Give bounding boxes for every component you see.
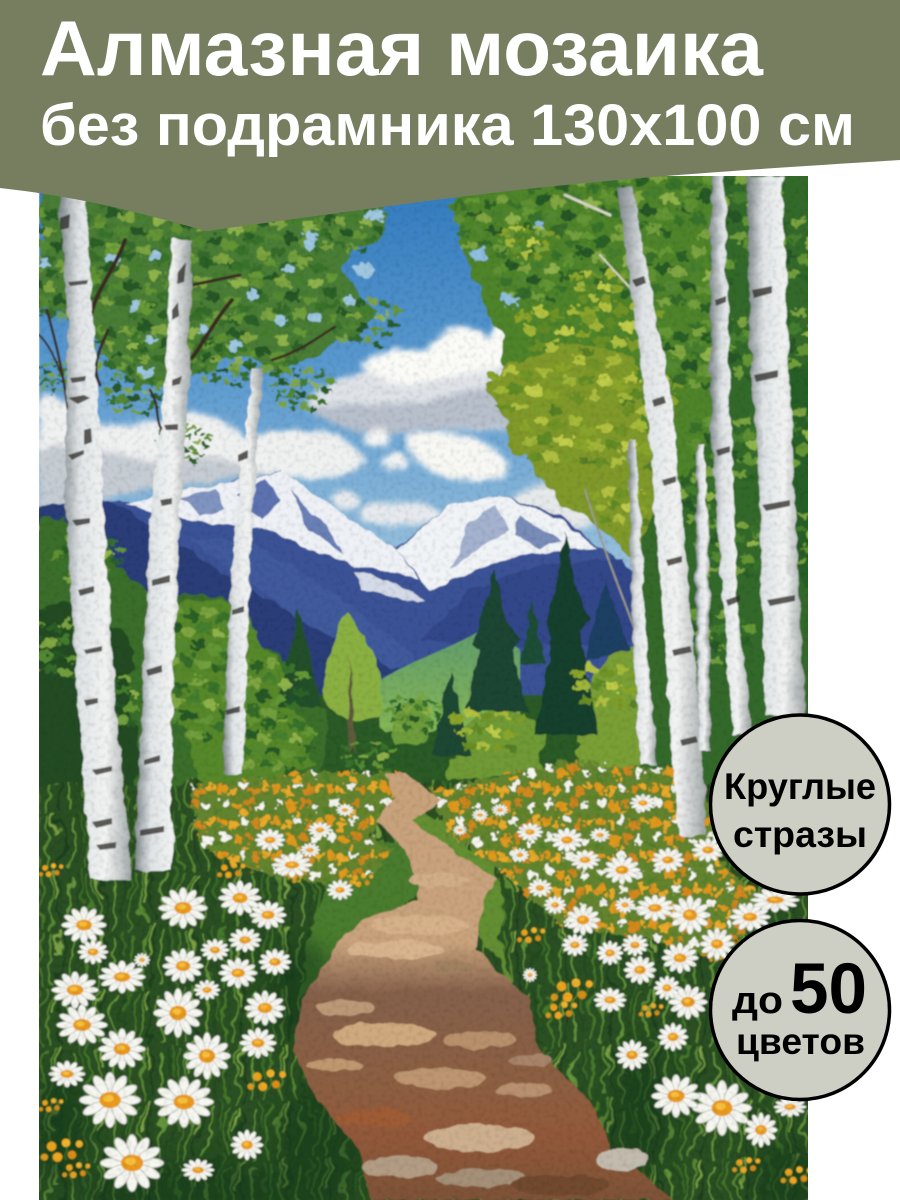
forest bush clusters	[18, 534, 442, 779]
daisies left	[49, 804, 354, 1192]
right foliage back	[640, 512, 740, 785]
right upper blooms	[430, 762, 770, 960]
left upper blooms	[190, 772, 400, 885]
forest base	[317, 694, 544, 738]
right foliage mass	[446, 176, 808, 714]
meadow light strips	[300, 805, 520, 1000]
mountains	[39, 470, 650, 700]
left foliage mass	[39, 176, 385, 388]
birch trunks	[58, 176, 805, 880]
header banner	[0, 0, 900, 231]
subtitle: без подрамника 130х100 см	[40, 93, 855, 158]
clouds	[39, 322, 596, 532]
sky gaps in left foliage	[40, 209, 384, 377]
title: Алмазная мозаика	[40, 4, 764, 92]
badge: round rhinestones	[710, 715, 890, 894]
badge: up to 50 colours: до	[732, 980, 783, 1022]
distant forest	[39, 515, 641, 790]
daisies right	[453, 794, 806, 1147]
birch bark marks	[60, 214, 795, 850]
left foliage clusters	[13, 193, 401, 464]
sky	[39, 193, 633, 572]
right foliage clusters	[450, 173, 836, 753]
meadow base	[10, 782, 840, 1200]
branches	[39, 195, 635, 630]
badge: up to 50 colours	[710, 920, 890, 1100]
badge: up to 50 colours: цветов	[736, 1021, 865, 1062]
painterly grain overlay	[39, 176, 808, 1200]
sky gaps in right foliage	[471, 221, 545, 306]
badge: round rhinestones: стразы	[733, 814, 867, 855]
green hills	[378, 625, 520, 735]
winding path	[293, 773, 673, 1200]
conifers	[278, 532, 630, 755]
path stones	[307, 873, 648, 1195]
foreground shadows	[30, 940, 830, 1200]
painting	[10, 160, 840, 1200]
orange flowers	[39, 862, 812, 1184]
badge: up to 50 colours: 50	[790, 950, 867, 1029]
badge: round rhinestones: Круглые	[724, 766, 876, 807]
